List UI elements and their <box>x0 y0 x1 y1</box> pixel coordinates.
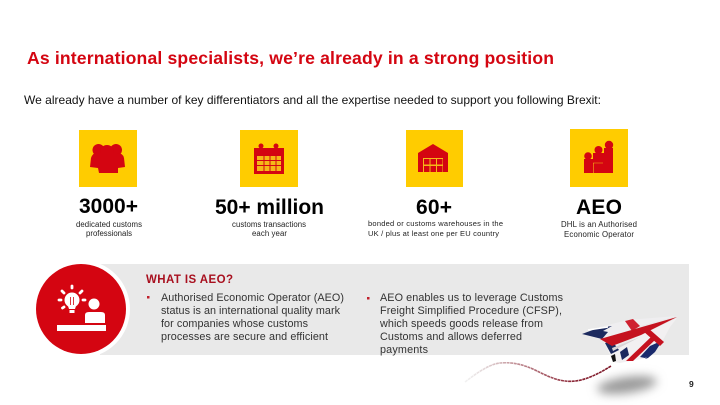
illustration: paper plane with trail <box>465 316 677 397</box>
icon: lightbulb and person badge <box>32 260 130 358</box>
icon: warehouse <box>406 130 463 187</box>
heading: AEO <box>576 196 622 219</box>
stat: customs professionals <box>76 130 142 238</box>
caption: bonded or customs warehouses in the <box>368 219 503 228</box>
intro text: We already have a number of key differentiators and all the expertise needed to support you following Brexit: <box>24 93 601 107</box>
icon: factory people <box>570 129 628 187</box>
caption: professionals <box>86 229 132 238</box>
caption <box>368 219 503 238</box>
bullet text: right: payments <box>380 344 429 356</box>
bullet text: left: for companies whose customs <box>161 318 309 330</box>
stat: AEO <box>561 129 637 239</box>
heading: WHAT IS AEO? <box>146 274 233 286</box>
bullet text: right: Freight Simplified Procedure (CFSP), <box>380 305 562 317</box>
bullet text: left <box>147 292 344 343</box>
caption: each year <box>252 229 287 238</box>
caption: UK / plus at least one per EU country <box>368 229 499 238</box>
title: As international specialists, we’re already in a strong position <box>27 48 554 68</box>
bullet text: left: processes are secure and efficient <box>161 331 328 343</box>
bullet text: right: Customs and allows deferred <box>380 331 522 343</box>
caption <box>561 220 637 239</box>
stat: customs transactions <box>215 130 324 238</box>
number: 60+ <box>416 196 452 219</box>
caption: Economic Operator <box>564 230 634 239</box>
bullet text: left: Authorised Economic Operator (AEO) <box>161 292 344 304</box>
bullet text: right: which speeds goods release from <box>379 318 543 330</box>
caption <box>232 220 306 238</box>
panel: what is AEO <box>32 260 689 358</box>
page number: 9 <box>689 379 694 389</box>
caption: customs transactions <box>232 220 306 229</box>
caption: DHL is an Authorised <box>561 220 637 229</box>
bullet text: left: status is an international quality mark <box>161 305 341 317</box>
number: 3000+ <box>79 195 138 218</box>
number: 50+ million <box>215 196 324 219</box>
icon: calendar <box>240 130 298 187</box>
bullet text: right: AEO enables us to leverage Customs <box>380 292 564 304</box>
icon: people <box>79 130 137 187</box>
caption: dedicated customs <box>76 220 142 229</box>
caption <box>76 220 142 238</box>
stat: warehouses <box>368 130 503 238</box>
bullet text: right <box>367 292 564 356</box>
